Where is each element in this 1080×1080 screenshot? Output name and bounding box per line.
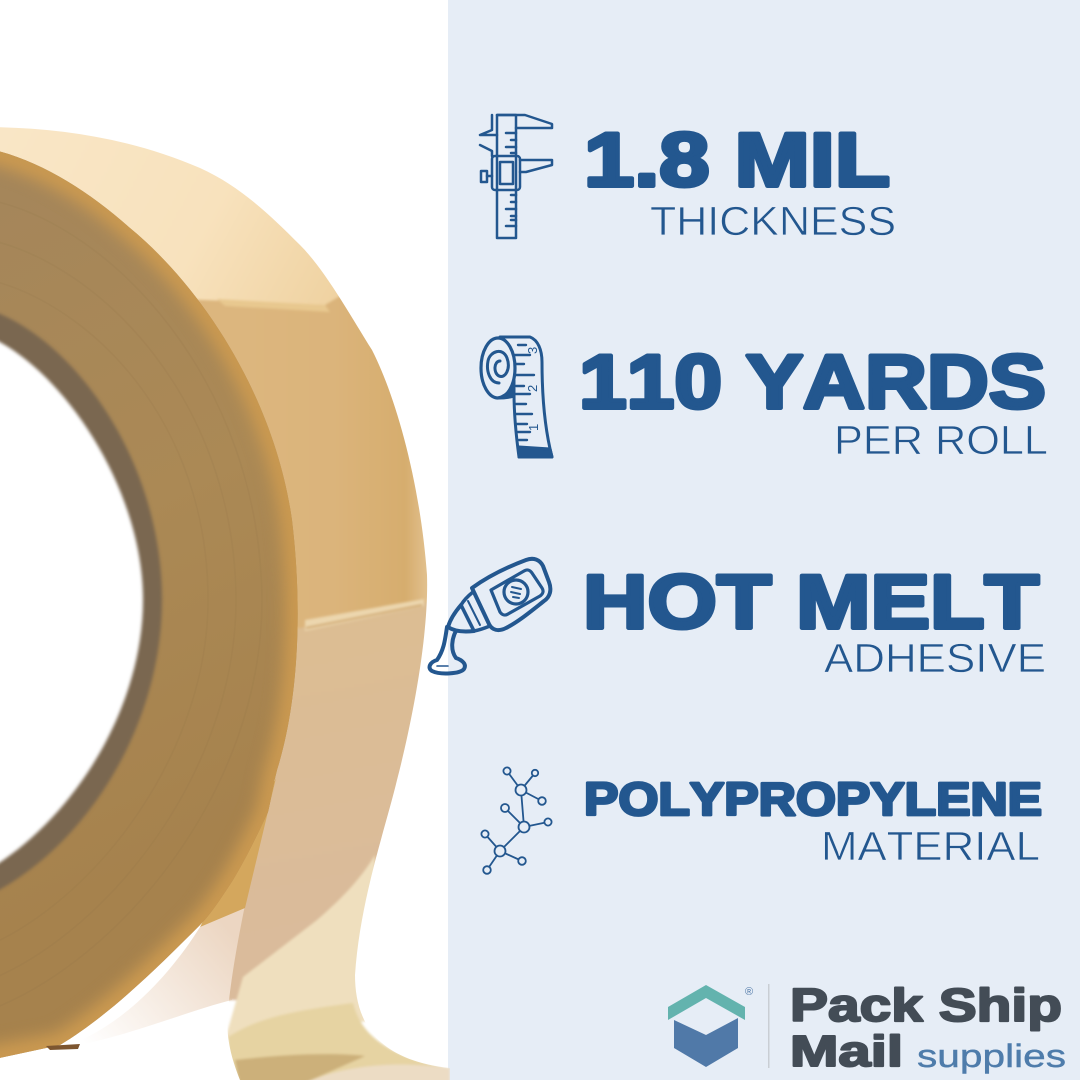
tape outer band [0, 120, 450, 1080]
value: hot melt: HOT MELT [583, 560, 1039, 645]
logo text: supplies: supplies [917, 1038, 1066, 1074]
photo: tape roll [0, 120, 450, 1080]
label: adhesive: ADHESIVE [824, 635, 1046, 681]
label: thickness: THICKNESS [650, 198, 896, 244]
icon: box body [674, 1018, 738, 1067]
label: per roll: PER ROLL [834, 417, 1048, 463]
hole [0, 330, 143, 880]
icon: box roof [668, 985, 745, 1020]
icon: tape measure: 1 [526, 424, 541, 431]
value: 110 YARDS: 110 YARDS [579, 340, 1046, 425]
tan fold under roll [200, 778, 276, 927]
spec: thickness [480, 115, 896, 244]
spec: adhesive [430, 559, 1046, 681]
panel: specs background [448, 0, 1080, 1080]
value: polypropylene: POLYPROPYLENE [584, 773, 1042, 825]
small floor contact shadow [46, 1044, 80, 1050]
logo divider [768, 984, 770, 1068]
logo text: Mail: Mail [790, 1027, 903, 1076]
label: material: MATERIAL [821, 823, 1040, 869]
value: 1.8 MIL: 1.8 MIL [584, 118, 890, 203]
icon: molecule [481, 767, 552, 874]
spec: yards [481, 337, 1048, 463]
spec: material [481, 767, 1042, 874]
roll front face [0, 140, 310, 1070]
icon: tape measure: 3 [525, 347, 540, 354]
icon: caliper [480, 115, 552, 238]
icon: tape measure [481, 337, 552, 457]
cardboard core [0, 305, 162, 904]
floor shadow [60, 905, 245, 1048]
registered mark: ® [745, 986, 753, 998]
icon: tape measure: 2 [525, 385, 540, 392]
logo text: Pack Ship: Pack Ship [790, 979, 1062, 1031]
logo: Pack Ship Mail supplies [668, 979, 1066, 1076]
icon: glue bottle [430, 559, 550, 673]
